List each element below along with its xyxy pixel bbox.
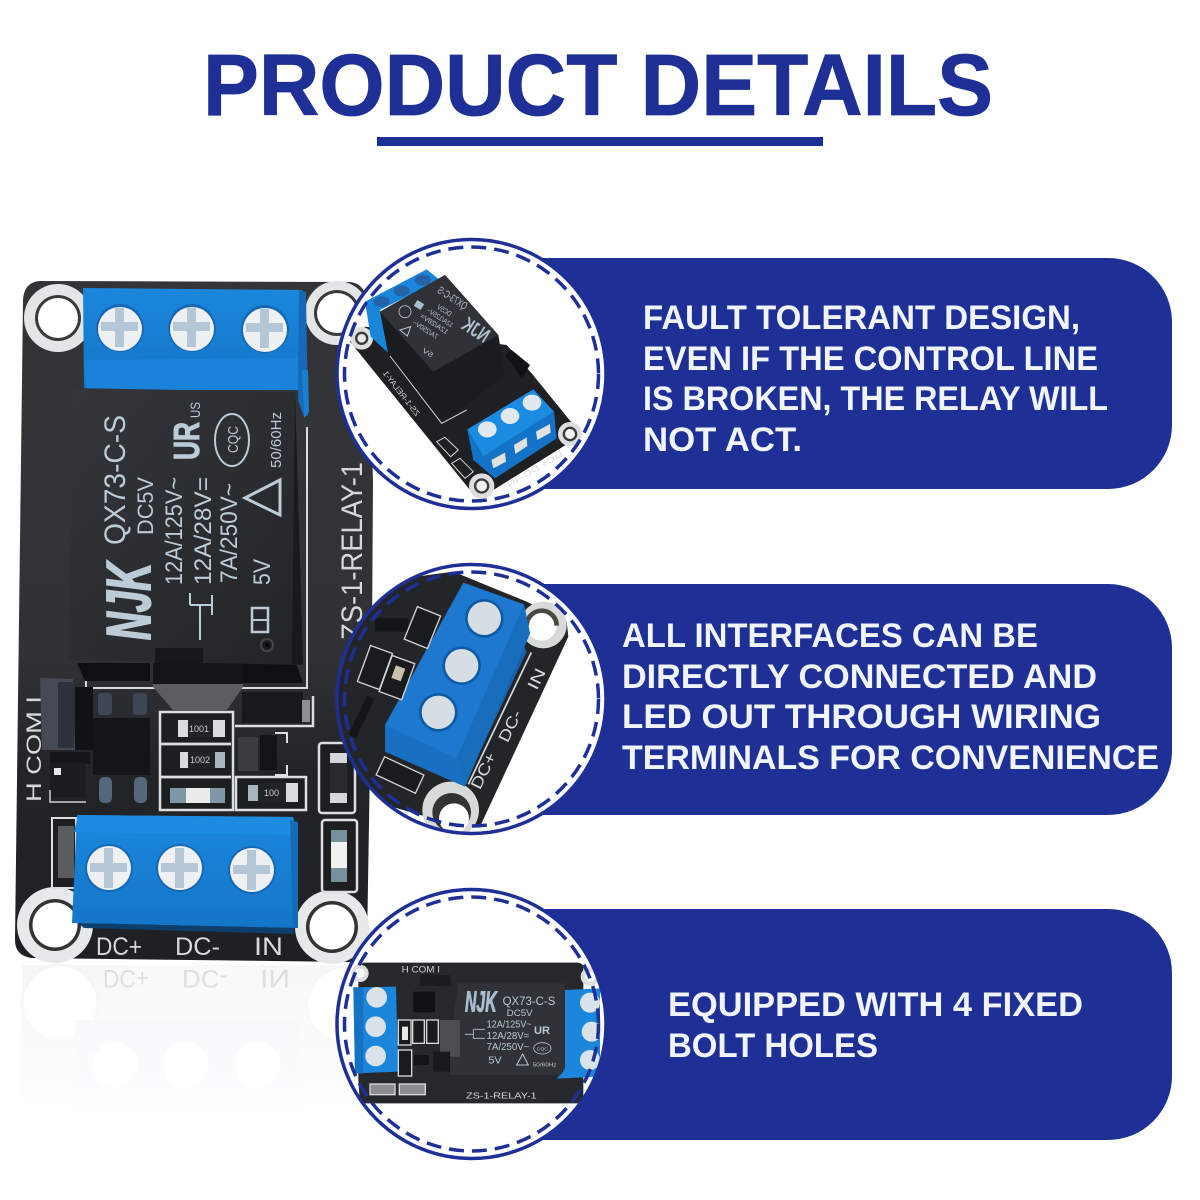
circle photo 3: top view of module: 5V [488,1055,502,1066]
reflection of the relay board [0,963,383,1133]
circle photo 1: angled relay module: 12A/125V~ [425,307,454,329]
smd components: 1001 [189,724,209,734]
panel text: DIRECTLY CONNECTED AND [622,658,1097,696]
relay printed markings: 7A/250V~ [216,483,243,583]
reflection of the relay board: DC+ [103,964,149,992]
circle photo 3: top view of module: QX73-C-S [503,994,555,1008]
panel text: IS BROKEN, THE RELAY WILL [643,380,1108,418]
circle photo 3: top view of module: H COM I [402,965,440,975]
circle photo 1: angled relay module: ZS-1-RELAY-1 [381,368,422,418]
ZS-1-RELAY-1 board label: ZS-1-RELAY-1 [336,462,369,640]
terminal labels: DC+ [96,933,142,961]
smd components: 100 [264,788,279,798]
circle photo 1: angled relay module [336,239,606,509]
circle photo 1: angled relay module: 7A/250V~ [411,319,439,341]
relay printed markings [95,402,285,640]
relay printed markings: 50/60Hz [268,412,285,468]
panel: interfaces [470,584,1172,815]
terminal labels: DC- [175,933,220,961]
reflection of the relay board: DC- [182,964,228,992]
circle photo 1: angled relay module: DC+ DC- IN [505,450,564,489]
smd components [52,692,357,892]
bottom terminal block [72,815,298,934]
relay printed markings: CQC [225,426,242,453]
panel: fault tolerant design [470,258,1172,489]
relay printed markings: 5V [249,559,276,585]
circle photo 1: angled relay module: DC5V [435,302,453,318]
relay printed markings: QX73-C-S [99,415,132,545]
relay printed markings: DC5V [133,477,158,535]
relay body [68,388,303,710]
circle photo 2: terminal block close-up: DC- [496,708,526,745]
circle photo 3: top view of module: 12A/28V= [487,1031,529,1042]
H COM I board label: H COM I [23,696,46,802]
circle photo 3: top view of module: UR [534,1025,550,1037]
title underline [377,137,823,146]
circle photo 3: top view of module: 7A/250V~ [487,1042,529,1053]
silkscreen outlines [86,427,307,688]
relay printed markings: 12A/28V= [190,477,217,585]
jumper [40,678,93,802]
circle photo 2: terminal block close-up: DC+ [468,750,500,792]
terminal labels: IN [254,933,283,961]
panel text: EVEN IF THE CONTROL LINE [643,340,1098,378]
panel text: FAULT TOLERANT DESIGN, [643,299,1080,337]
panel text: EQUIPPED WITH 4 FIXED [668,986,1083,1024]
panel text [643,299,1108,459]
panel text: LED OUT THROUGH WIRING [622,698,1101,736]
panel text [668,986,1083,1065]
circle photo 1: angled relay module: 5V [420,347,434,359]
panel text [622,617,1159,777]
circle photo 3: top view of module: 12A/125V~ [487,1020,532,1031]
optocoupler [93,693,150,803]
circle photo 1: angled relay module: 12A/28V= [419,313,449,336]
circuit board [15,281,373,962]
circle photo 2: terminal block close-up [330,564,606,838]
circle photo 1: angled relay module: QX73-C-S [435,284,470,313]
circle photo 3: top view of module: DC5V [507,1008,533,1018]
top terminal block [83,288,309,418]
circle photo 3: top view of module: 50/60Hz [533,1063,557,1069]
circle photo 1: angled relay module: NJK [457,313,494,348]
circle photo 3: top view of module [336,889,606,1159]
relay printed markings: NJK [95,560,164,640]
circle photo 3: top view of module: ZS-1-RELAY-1 [466,1090,537,1100]
smd components: 1002 [190,755,210,765]
circle photo 2: terminal block close-up: IN [525,666,550,693]
panel text: BOLT HOLES [668,1027,878,1065]
terminal labels [96,933,283,961]
panel: bolt holes [470,909,1172,1140]
mounting holes [17,281,369,964]
panel text: TERMINALS FOR CONVENIENCE [622,739,1159,777]
relay printed markings: 12A/125V~ [161,477,188,585]
circle photo 3: top view of module: CQC [537,1046,549,1051]
panel text: NOT ACT. [643,421,802,459]
circle photo 3: top view of module: NJK [465,987,498,1019]
relay printed markings: UR [166,422,207,460]
main relay board photo [15,281,373,964]
title: PRODUCT DETAILS [203,37,993,134]
reflection of the relay board: IN [260,964,290,992]
relay printed markings: US [187,402,203,418]
panel text: ALL INTERFACES CAN BE [622,617,1038,655]
